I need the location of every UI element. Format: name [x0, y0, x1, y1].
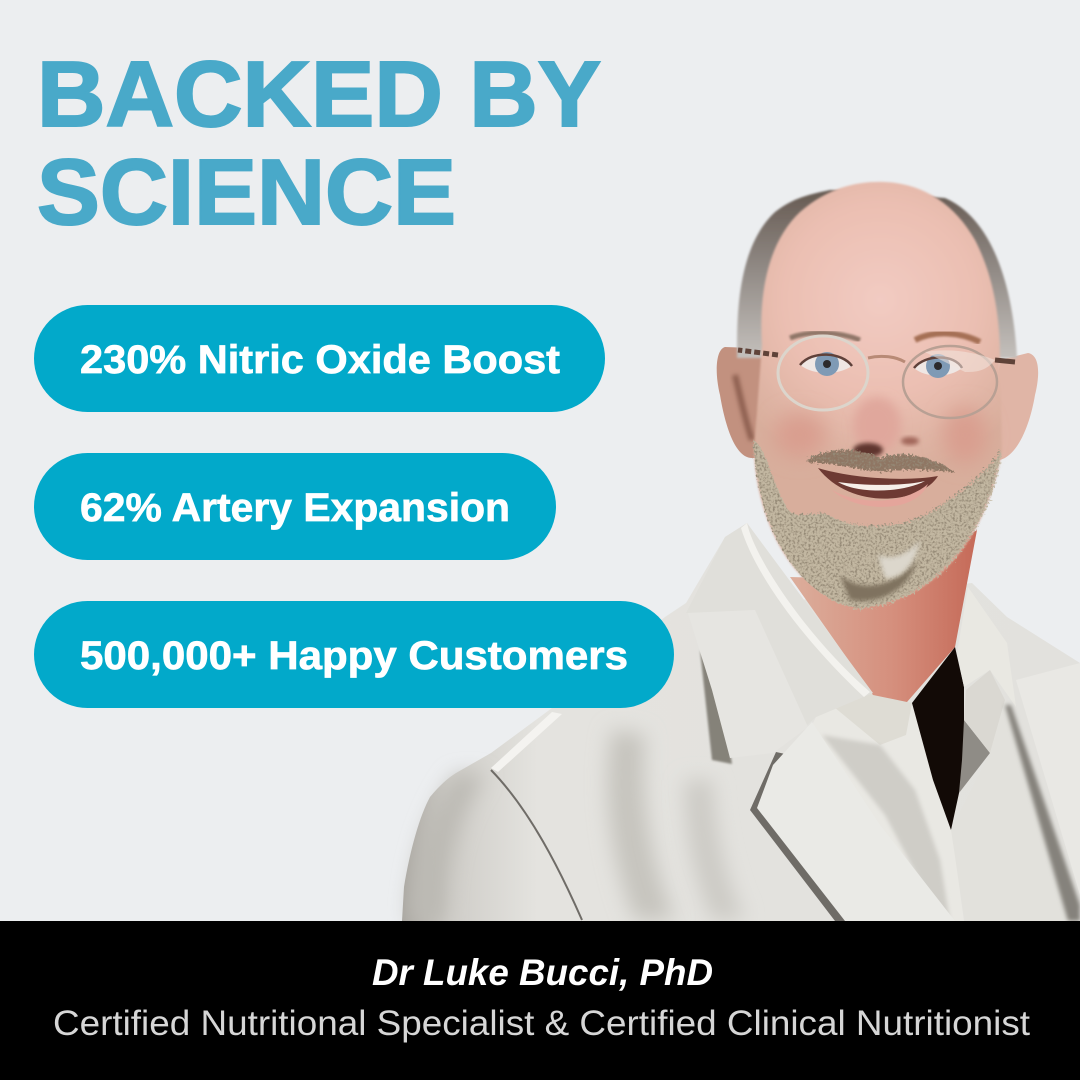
portrait: Dr Luke Bucci — [402, 182, 1080, 921]
dark shirt opening — [912, 647, 964, 830]
head — [754, 182, 1002, 607]
right coat panel — [951, 663, 1080, 921]
lower left lapel — [750, 722, 955, 921]
footer band — [0, 921, 1080, 1080]
hair — [737, 190, 1017, 358]
left collar — [686, 523, 873, 740]
right ear — [990, 353, 1038, 460]
pill: happy customers — [34, 601, 674, 708]
face shading — [774, 397, 987, 463]
pill: artery expansion: 62% Artery Expansion — [80, 486, 510, 530]
shirt — [808, 693, 964, 921]
title — [37, 42, 601, 244]
upper left lapel — [688, 610, 808, 764]
title: BACKED BY — [37, 42, 601, 146]
right collar — [957, 587, 1016, 793]
credentials: Certified Nutritional Specialist & Certified Clinical Nutritionist — [53, 1004, 1030, 1043]
lab coat — [402, 523, 1080, 921]
pill: artery expansion — [34, 453, 556, 560]
doctor name: Dr Luke Bucci, PhD — [372, 952, 713, 993]
collar highlight — [741, 523, 870, 697]
neck — [790, 530, 977, 702]
mustache — [806, 450, 955, 472]
eyebrows — [790, 333, 980, 342]
beard — [753, 440, 1001, 609]
left ear — [717, 347, 768, 458]
title: SCIENCE — [37, 140, 456, 244]
eyes — [800, 352, 962, 378]
pill: happy customers: 500,000+ Happy Customers — [80, 634, 628, 678]
pill: nitric oxide — [34, 305, 605, 412]
glasses — [738, 336, 1015, 418]
pill: nitric oxide: 230% Nitric Oxide Boost — [80, 338, 560, 382]
mouth — [818, 468, 938, 507]
